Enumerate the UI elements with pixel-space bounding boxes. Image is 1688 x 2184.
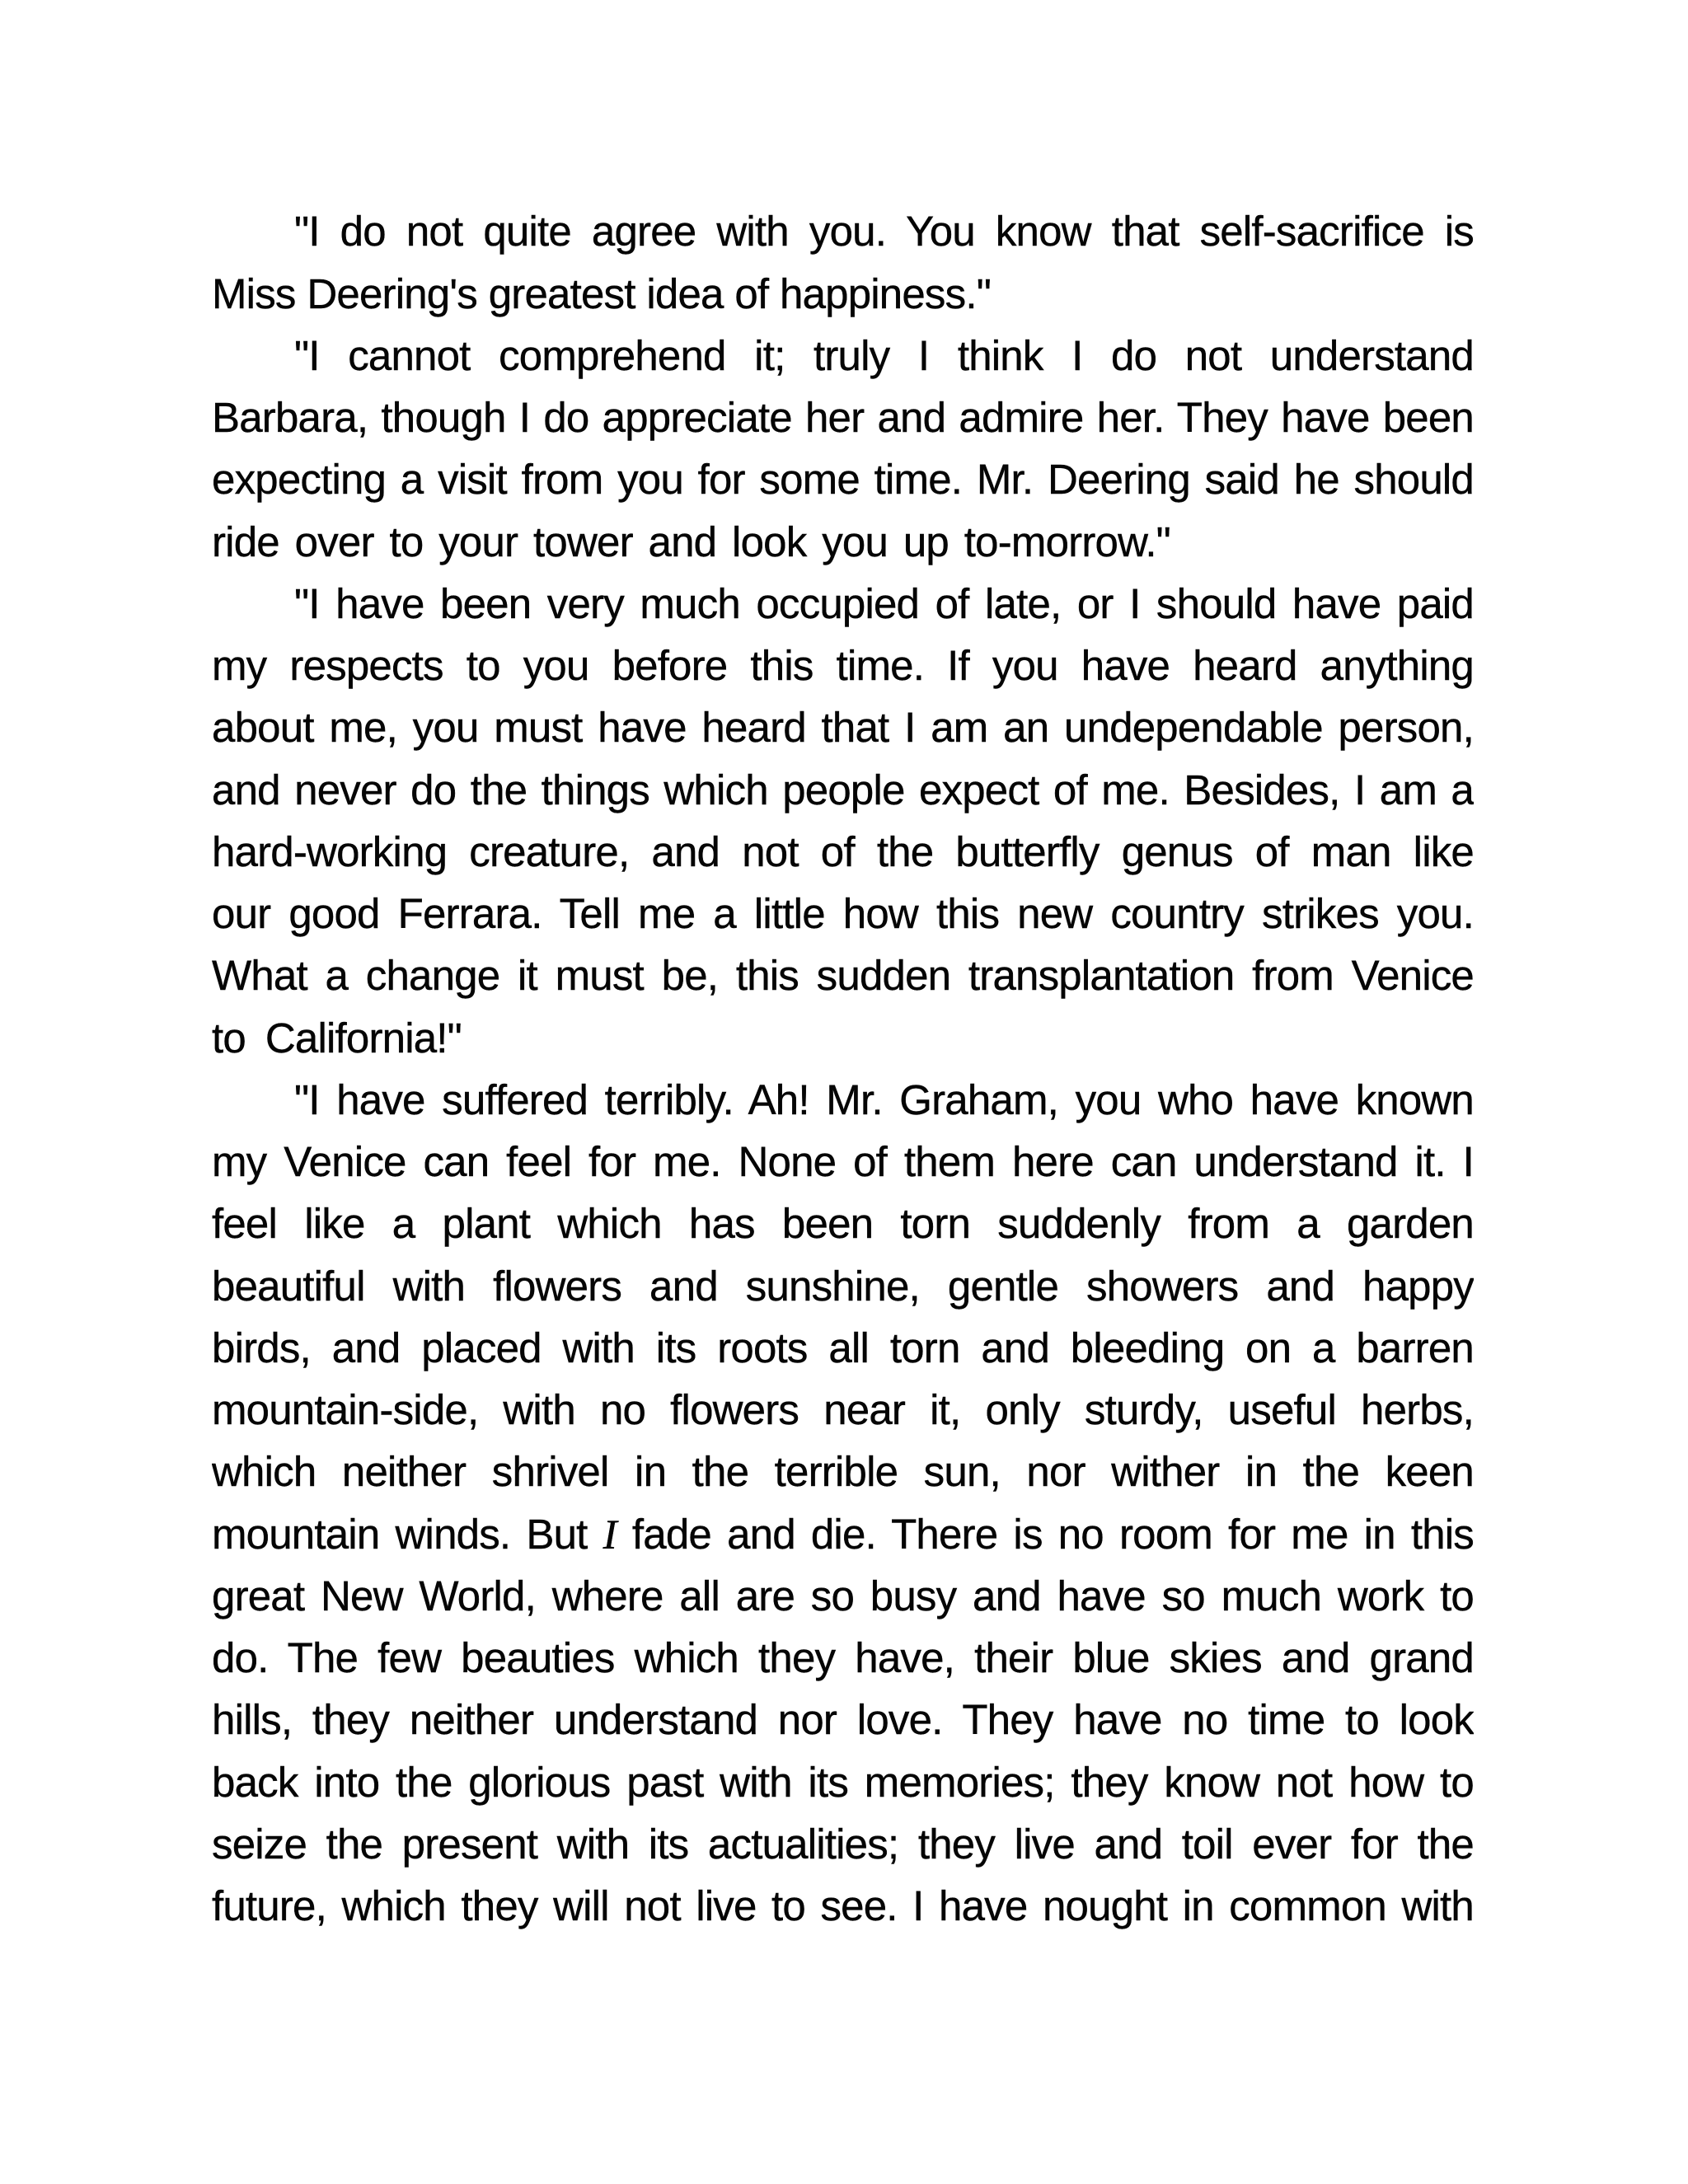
- paragraph: self-sacrifice reply: "I do not quite agree with you. You know that self-sacrifice is: [294, 208, 1474, 255]
- paragraph: occupied of late: [212, 580, 1474, 1062]
- paragraph: occupied of late: "I have been very much occupied of late, or I should have paid: [294, 580, 1474, 627]
- paragraph: occupied of late: What a change it must be, this sudden transplantation from Venice: [212, 952, 1474, 999]
- paragraph: self-sacrifice reply: [212, 208, 1474, 317]
- paragraph: occupied of late: and never do the things which people expect of me. Besides, I am a: [212, 766, 1474, 813]
- paragraph: suffered terribly: back into the glorious past with its memories; they know not how to: [212, 1759, 1474, 1806]
- paragraph: self-sacrifice reply: Miss Deering's greatest idea of happiness.": [212, 270, 991, 317]
- paragraph: suffered terribly: do. The few beauties which they have, their blue skies and grand: [212, 1634, 1474, 1681]
- paragraph: suffered terribly: [212, 1076, 1474, 1929]
- paragraph: suffered terribly: seize the present with its actualities; they live and toil ever for the: [212, 1821, 1474, 1868]
- paragraph: suffered terribly: hills, they neither understand nor love. They have no time to look: [212, 1696, 1474, 1743]
- paragraph: occupied of late: to California!": [212, 1015, 462, 1062]
- paragraph: occupied of late: about me, you must have heard that I am an undependable person,: [212, 704, 1474, 751]
- paragraph: suffered terribly: beautiful with flowers and sunshine, gentle showers and happy: [212, 1263, 1474, 1310]
- paragraph: occupied of late: hard-working creature, and not of the butterfly genus of man like: [212, 828, 1474, 875]
- paragraph: Barbara: "I cannot comprehend it; truly I think I do not understand: [294, 332, 1474, 379]
- paragraph: suffered terribly: which neither shrivel in the terrible sun, nor wither in the keen: [212, 1448, 1474, 1495]
- paragraph: Barbara: [212, 332, 1474, 565]
- paragraph: suffered terribly: mountain winds. But I fade and die. There is no room for me in this: [212, 1511, 1474, 1558]
- paragraph: Barbara: ride over to your tower and look you up to-morrow.": [212, 518, 1170, 565]
- paragraph: suffered terribly: my Venice can feel for me. None of them here can understand it. I: [212, 1138, 1474, 1185]
- paragraph: Barbara: expecting a visit from you for some time. Mr. Deering said he should: [212, 456, 1474, 503]
- paragraph: occupied of late: our good Ferrara. Tell me a little how this new country strikes you.: [212, 890, 1474, 937]
- paragraph: Barbara: Barbara, though I do appreciate her and admire her. They have been: [212, 394, 1474, 441]
- paragraph: suffered terribly: great New World, where all are so busy and have so much work to: [212, 1572, 1474, 1619]
- paragraph: suffered terribly: birds, and placed with its roots all torn and bleeding on a barren: [212, 1324, 1474, 1371]
- paragraph: suffered terribly: future, which they will not live to see. I have nought in common with: [212, 1882, 1474, 1929]
- paragraph: occupied of late: my respects to you before this time. If you have heard anything: [212, 642, 1474, 689]
- paragraph: suffered terribly: "I have suffered terribly. Ah! Mr. Graham, you who have known: [294, 1076, 1474, 1123]
- paragraph: suffered terribly: mountain-side, with no flowers near it, only sturdy, useful herbs,: [212, 1386, 1474, 1433]
- paragraph: suffered terribly: feel like a plant which has been torn suddenly from a garden: [212, 1200, 1474, 1247]
